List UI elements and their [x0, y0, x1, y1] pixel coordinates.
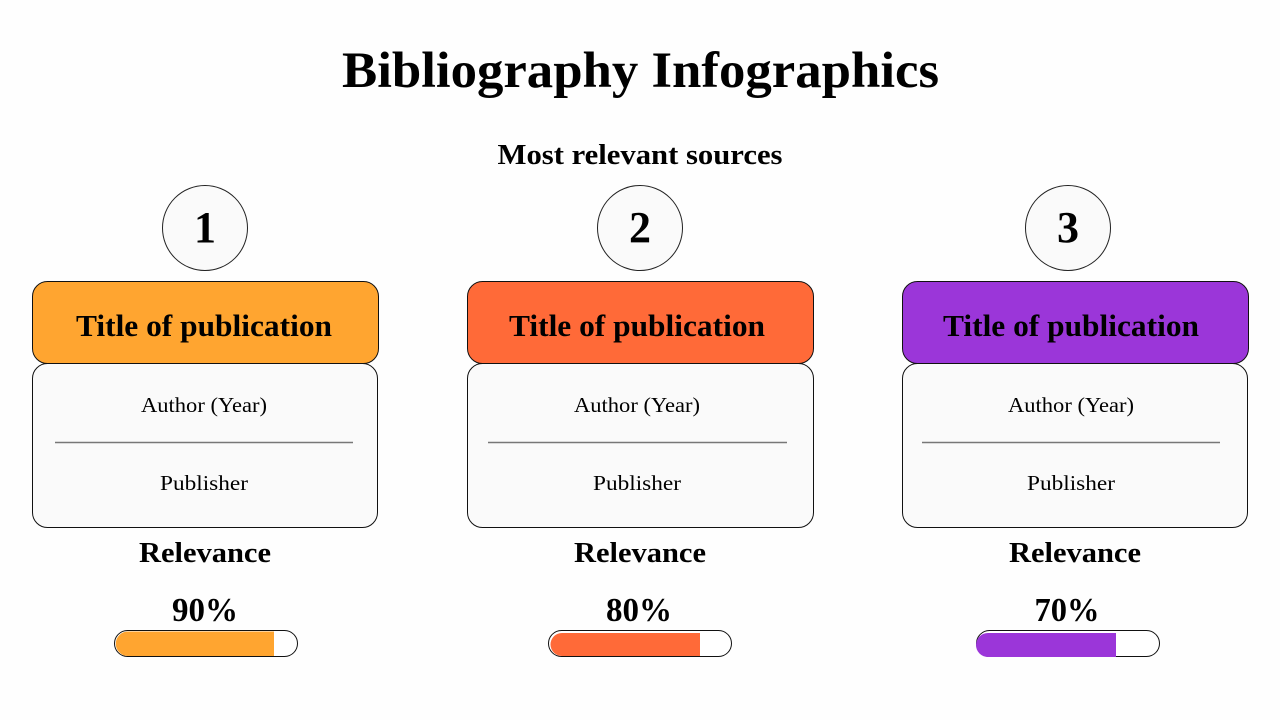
details box 3: Publisher: [1027, 471, 1115, 495]
details box 2: Author (Year): [574, 393, 700, 417]
number badge 1: [162, 186, 248, 270]
details box 2: Publisher: [593, 471, 681, 495]
percentage 3: 70%: [1034, 592, 1100, 629]
title box 1: Title of publication: [76, 308, 332, 343]
progress bar 1: [114, 630, 298, 656]
title box 3: [902, 282, 1248, 364]
details box 3: [902, 364, 1248, 528]
details box 1: Publisher: [160, 471, 248, 495]
panel: source 3: [902, 186, 1248, 657]
subtitle: Most relevant sources: [498, 140, 783, 171]
progress bar 2: [548, 630, 732, 656]
title: Bibliography Infographics: [342, 43, 939, 99]
relevance label 1: Relevance: [139, 538, 271, 569]
number badge 3: [1026, 186, 1110, 270]
number badge 2: [598, 186, 682, 270]
details box 3: Author (Year): [1008, 393, 1134, 417]
details box 2: [468, 364, 814, 528]
percentage 2: 80%: [606, 592, 672, 629]
details box 1: Author (Year): [141, 393, 267, 417]
title box 3: Title of publication: [943, 308, 1199, 343]
panel: source 1: [32, 186, 378, 656]
relevance label 2: Relevance: [574, 538, 706, 569]
title box 2: Title of publication: [509, 308, 765, 343]
panel: source 2: [468, 186, 814, 656]
title box 2: [468, 282, 814, 364]
relevance label 3: Relevance: [1009, 538, 1141, 569]
percentage 1: 90%: [172, 592, 238, 629]
progress bar 3: [976, 630, 1160, 657]
title box 1: [32, 282, 378, 364]
number badge 2: 2: [629, 203, 651, 252]
number badge 1: 1: [194, 203, 216, 252]
number badge 3: 3: [1057, 203, 1079, 252]
details box 1: [32, 364, 378, 528]
